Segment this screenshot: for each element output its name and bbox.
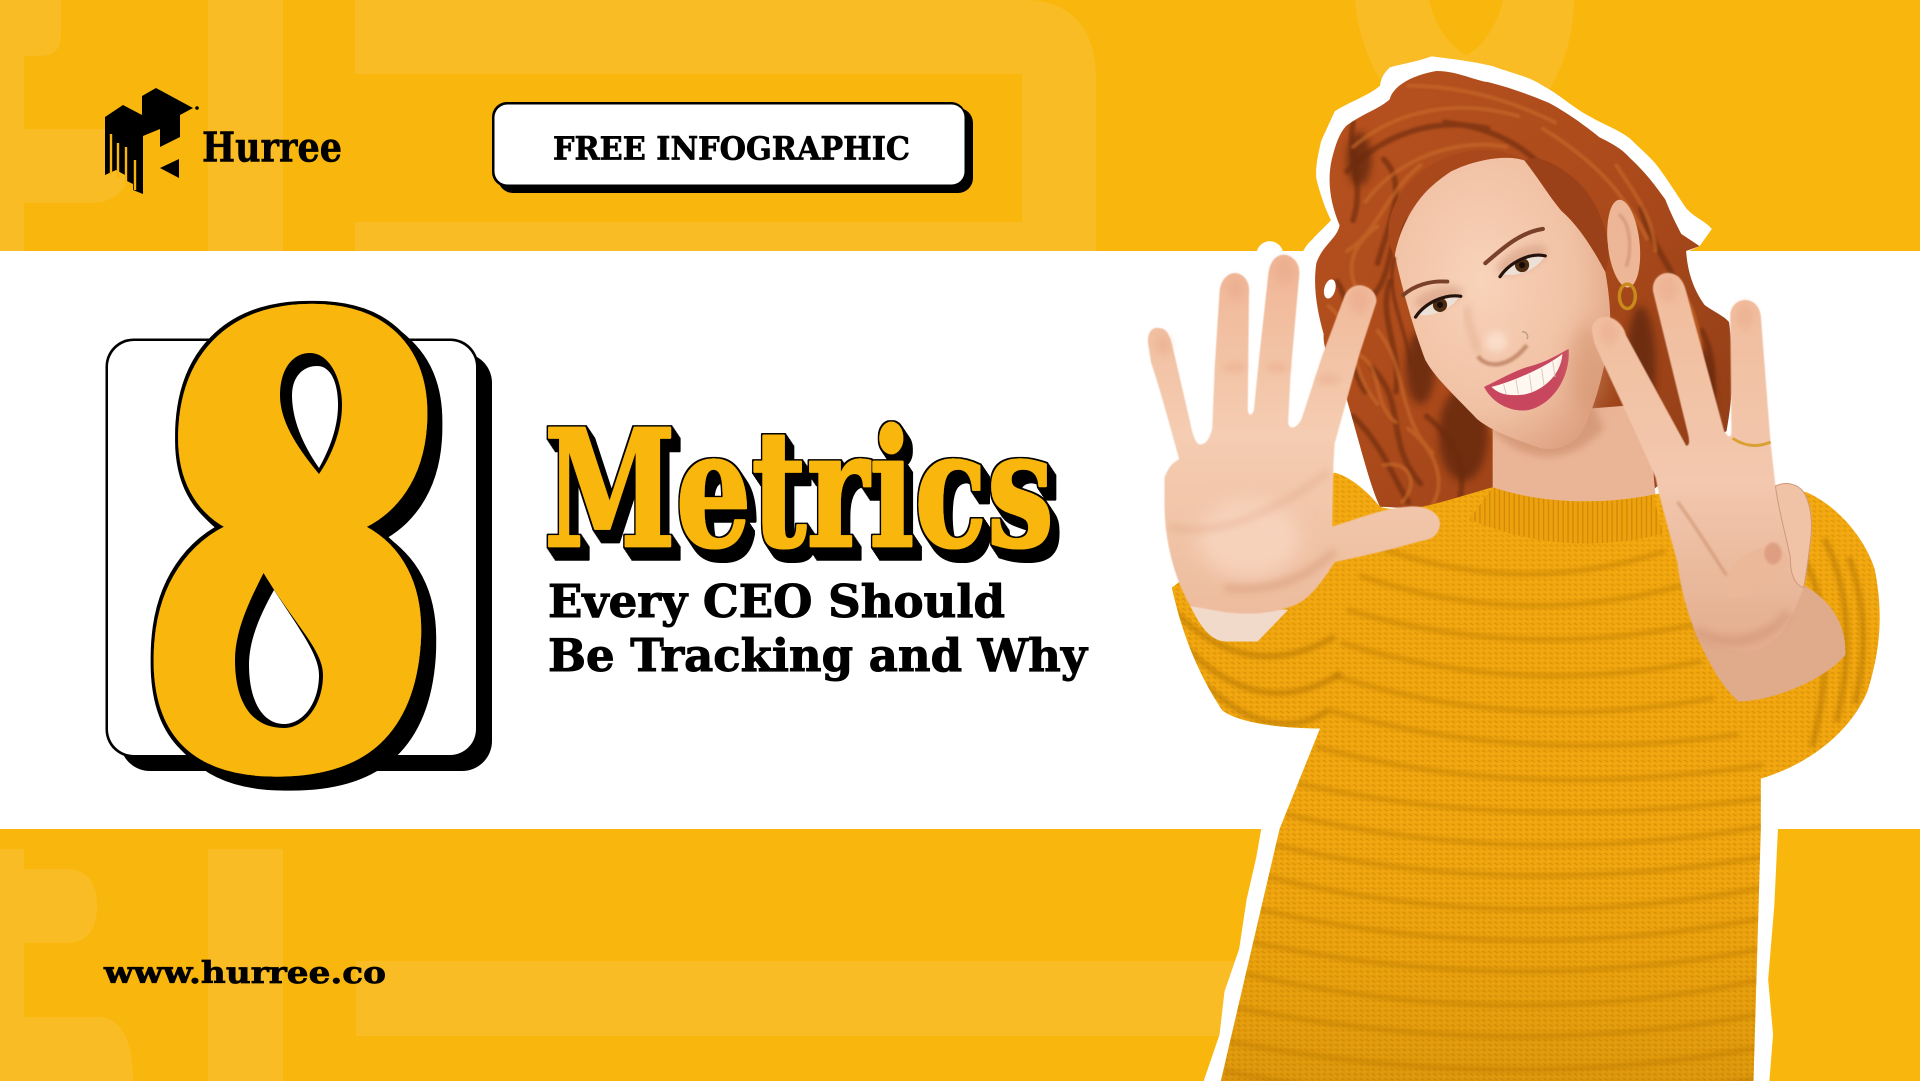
button: free infographic: FREE INFOGRAPHIC [553, 130, 910, 168]
hair shadow masses [1347, 132, 1714, 481]
background watermark: bottom band shapes [0, 849, 1256, 1081]
eyebrows [1403, 229, 1543, 295]
right arm [1696, 585, 1845, 702]
neck [1493, 404, 1656, 501]
number 8 lower teardrop counter [221, 536, 345, 744]
sweater soft folds [1224, 545, 1763, 1081]
right hand showing three fingers [1592, 273, 1811, 652]
logo: Hurree [105, 88, 342, 194]
number card background [106, 338, 492, 771]
hair: front strands by face [1322, 150, 1608, 367]
sleeve folds [1176, 539, 1863, 747]
sweater [1163, 465, 1898, 1081]
person illustration: woman showing eight fingers [1148, 56, 1898, 1081]
website url: www.hurree.co [103, 956, 386, 991]
mouth [1484, 349, 1569, 410]
subtitle [548, 575, 1089, 682]
hair: back mass [1315, 71, 1732, 519]
subtitle: Be Tracking and Why [548, 629, 1089, 682]
button: free infographic [492, 102, 973, 193]
face [1395, 158, 1610, 449]
subtitle: Every CEO Should [548, 575, 1005, 628]
left hand with five fingers spread [1148, 255, 1440, 614]
background watermark: top band shapes [0, 0, 1574, 251]
sweater collar ribbing [1469, 487, 1663, 543]
ring [1733, 438, 1771, 446]
ear and earring [1603, 198, 1644, 309]
big number 8: 8 [120, 155, 470, 914]
logo wordmark: Hurree [202, 124, 342, 172]
nose [1467, 306, 1528, 364]
folded thumb [1727, 547, 1788, 598]
folded pinky finger [1776, 484, 1811, 588]
white central band [0, 251, 1920, 829]
sticker outline: white halo [1204, 56, 1778, 1081]
jaw shade [1569, 323, 1608, 411]
icon: Hurree building mark [105, 88, 199, 194]
left arm and wrist [1190, 606, 1288, 642]
title: Metrics: Metrics [544, 395, 1054, 585]
number 8 upper teardrop counter [233, 333, 354, 523]
eyes [1416, 255, 1545, 317]
eye sockets shading [1413, 239, 1551, 314]
